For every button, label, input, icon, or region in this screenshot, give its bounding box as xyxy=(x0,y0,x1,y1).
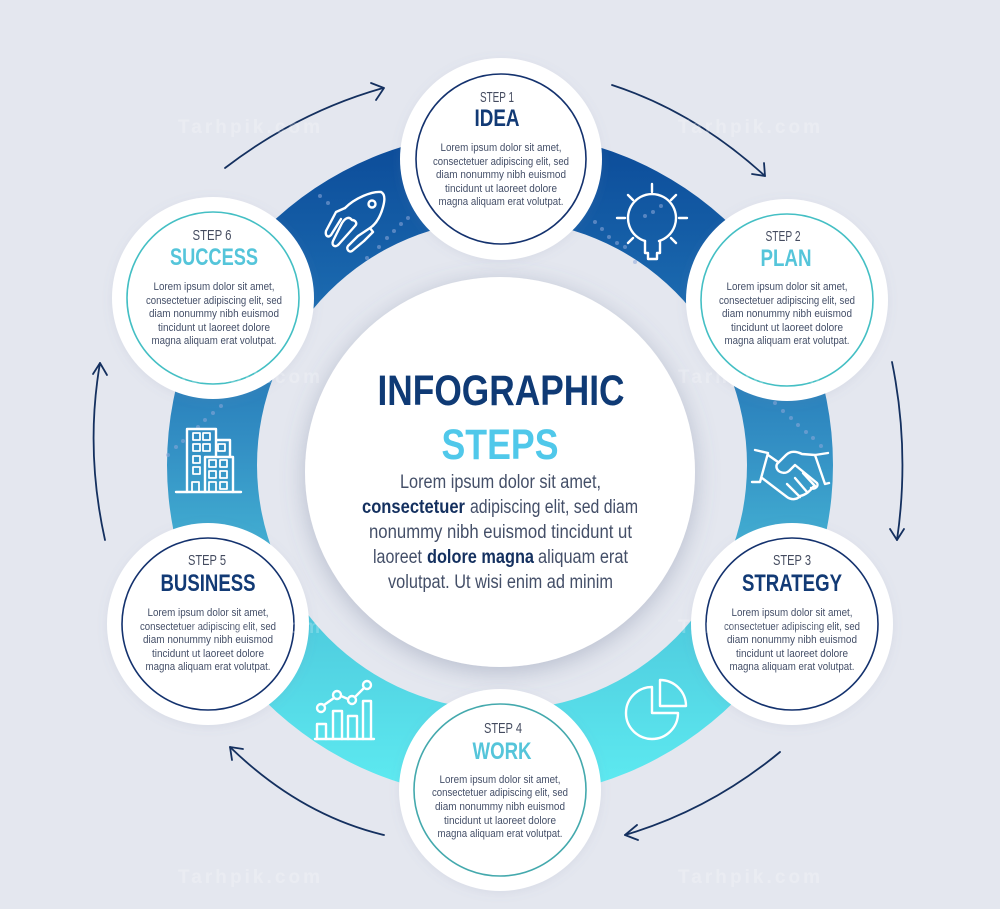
panel: step 6 success: consectetuer adipiscing elit, sed xyxy=(146,295,282,307)
panel: step 5 business: consectetuer adipiscing elit, sed xyxy=(140,621,276,633)
arrow: step 3 to step 4 xyxy=(625,752,780,840)
icon: growth chart xyxy=(315,681,374,739)
arrow: step 5 to step 6 xyxy=(93,363,107,540)
panel: step 2 plan: tincidunt ut laoreet dolore xyxy=(731,322,843,334)
watermarks: Tarhpik.com xyxy=(178,867,320,888)
panel: step 1 idea: diam nonummy nibh euismod xyxy=(436,169,566,181)
icon: handshake xyxy=(752,450,829,499)
panel: step 3 strategy: consectetuer adipiscing elit, sed xyxy=(724,621,860,633)
panel: step 5 business: tincidunt ut laoreet dolore xyxy=(152,648,264,660)
panel: step 6 success: SUCCESS xyxy=(170,244,258,271)
panel: step 3 strategy: tincidunt ut laoreet dolore xyxy=(736,648,848,660)
panel: step 2 plan: PLAN xyxy=(760,245,812,272)
panel: step 6 success: magna aliquam erat volutpat. xyxy=(152,335,276,347)
panel: step 4 work: consectetuer adipiscing elit, sed xyxy=(432,787,568,799)
panel: step 2 plan xyxy=(686,199,888,401)
center paragraph: Lorem ipsum dolor sit amet, xyxy=(400,472,601,493)
panel: step 3 strategy: STRATEGY xyxy=(742,570,842,597)
watermarks: Tarhpik.com xyxy=(178,617,320,638)
panel: step 5 business xyxy=(107,523,309,725)
icon: buildings xyxy=(176,429,241,492)
panel: step 3 strategy: STEP 3 xyxy=(773,552,811,569)
panel: step 2 plan: consectetuer adipiscing elit, sed xyxy=(719,295,855,307)
panel: step 5 business: magna aliquam erat volutpat. xyxy=(146,661,270,673)
panel: step 4 work: diam nonummy nibh euismod xyxy=(435,801,565,813)
panel: step 4 work: tincidunt ut laoreet dolore xyxy=(444,815,556,827)
panel: step 6 success: diam nonummy nibh euismod xyxy=(149,308,279,320)
panel: step 6 success xyxy=(112,197,314,399)
center paragraph xyxy=(362,472,638,593)
center paragraph: adipiscing elit, sed diam xyxy=(470,497,638,518)
watermarks: Tarhpik.com xyxy=(678,617,820,638)
watermarks xyxy=(178,117,820,888)
panel: step 2 plan: diam nonummy nibh euismod xyxy=(722,308,852,320)
center paragraph: nonummy nibh euismod tincidunt ut xyxy=(369,522,633,543)
panel: step 1 idea: magna aliquam erat volutpat. xyxy=(438,196,564,208)
panel: step 1 idea: consectetuer adipiscing elit, sed xyxy=(433,156,569,168)
panel: step 4 work: Lorem ipsum dolor sit amet, xyxy=(440,774,560,786)
panel: step 3 strategy: diam nonummy nibh euismod xyxy=(727,634,857,646)
arrow: step 2 to step 3 xyxy=(890,362,904,540)
panel: step 4 work: magna aliquam erat volutpat. xyxy=(438,828,562,840)
panel: step 2 plan: Lorem ipsum dolor sit amet, xyxy=(726,281,848,293)
center paragraph: laoreet xyxy=(373,547,423,568)
ring dot texture xyxy=(166,194,823,457)
panel: step 1 idea: Lorem ipsum dolor sit amet, xyxy=(440,142,562,154)
panel: step 2 plan: magna aliquam erat volutpat. xyxy=(724,335,850,347)
panel: step 4 work: STEP 4 xyxy=(484,720,522,737)
watermarks: Tarhpik.com xyxy=(178,367,320,388)
heading: steps: STEPS xyxy=(442,421,558,469)
panel: step 1 idea: tincidunt ut laoreet dolore xyxy=(445,183,557,195)
panel: step 5 business: Lorem ipsum dolor sit amet, xyxy=(148,607,268,619)
panel: center circle xyxy=(305,277,695,667)
arrow: step 4 to step 5 xyxy=(230,747,384,835)
icon: pie chart xyxy=(626,680,686,739)
panel: step 4 work: WORK xyxy=(472,738,532,765)
watermarks: Tarhpik.com xyxy=(678,867,820,888)
panel: step 3 strategy: magna aliquam erat volutpat. xyxy=(730,661,854,673)
gradient ring band xyxy=(167,132,833,798)
center paragraph: volutpat. Ut wisi enim ad minim xyxy=(388,572,613,593)
panel: step 4 work xyxy=(399,689,601,891)
watermarks: Tarhpik.com xyxy=(178,117,320,138)
panel: step 6 success: STEP 6 xyxy=(192,227,232,244)
heading: infographic: INFOGRAPHIC xyxy=(378,367,624,415)
panel: step 1 idea xyxy=(400,58,602,260)
icon: rocket xyxy=(326,192,384,252)
panel: step 1 idea: STEP 1 xyxy=(480,89,514,106)
center paragraph: aliquam erat xyxy=(538,547,629,568)
panel: step 5 business: BUSINESS xyxy=(160,570,256,597)
panel: step 6 success: Lorem ipsum dolor sit amet, xyxy=(154,281,274,293)
arrow: step 1 to step 2 xyxy=(612,85,765,176)
panel: step 5 business: STEP 5 xyxy=(188,552,226,569)
watermarks: Tarhpik.com xyxy=(678,117,820,138)
center paragraph: dolore magna xyxy=(427,547,534,568)
panel: step 3 strategy: Lorem ipsum dolor sit amet, xyxy=(732,607,852,619)
watermarks: Tarhpik.com xyxy=(678,367,820,388)
icon: light bulb xyxy=(617,184,687,259)
arrow: step 6 to step 1 xyxy=(225,83,384,168)
center paragraph: consectetuer xyxy=(362,497,466,518)
panel: step 6 success: tincidunt ut laoreet dolore xyxy=(158,322,270,334)
panel: step 5 business: diam nonummy nibh euismod xyxy=(143,634,273,646)
panel: step 2 plan: STEP 2 xyxy=(766,228,800,245)
panel: step 3 strategy xyxy=(691,523,893,725)
panel: step 1 idea: IDEA xyxy=(474,105,520,132)
